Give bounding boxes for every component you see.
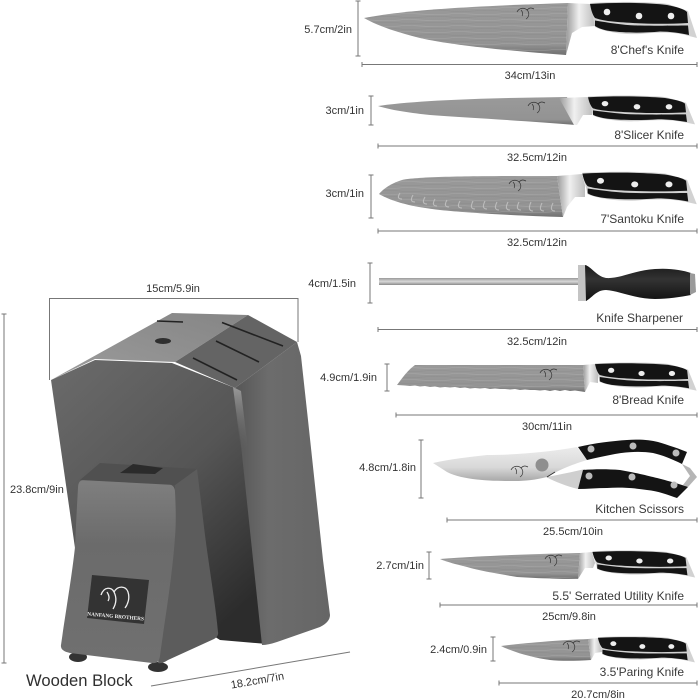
height dimension — [368, 96, 374, 125]
plate wordmark: NANFANG BROTHERS — [87, 612, 144, 622]
height dimension — [384, 364, 390, 391]
small block notch — [120, 464, 163, 474]
length dimension — [378, 327, 697, 332]
height label: 3cm/1in — [325, 105, 364, 117]
knife name: 7'Santoku Knife — [600, 212, 684, 226]
sharpener end cap — [690, 273, 696, 295]
height label: 23.8cm/9in — [10, 484, 64, 496]
santoku handle — [582, 172, 697, 204]
serrated blade — [440, 552, 595, 579]
panel: chef's knife — [304, 1, 697, 82]
length label: 34cm/13in — [505, 70, 555, 82]
length dimension — [362, 62, 697, 67]
length dimension — [378, 228, 697, 234]
panel: santoku knife — [325, 172, 697, 249]
height dimension — [368, 175, 374, 218]
panel: bread knife — [320, 362, 697, 433]
tool name: Kitchen Scissors — [595, 502, 684, 516]
santoku blade — [379, 174, 585, 217]
chef blade — [364, 3, 595, 55]
lower scissor handle — [578, 469, 688, 498]
lower scissor blade — [546, 469, 585, 489]
small block top face — [80, 463, 197, 485]
block name: Wooden Block — [26, 671, 133, 690]
height label: 4.8cm/1.8in — [359, 462, 416, 474]
length dimension — [447, 518, 697, 522]
knife name: 3.5'Paring Knife — [600, 665, 684, 679]
knife slots — [157, 321, 283, 380]
bread blade — [397, 364, 598, 392]
height label: 5.7cm/2in — [304, 24, 352, 36]
length label: 32.5cm/12in — [507, 152, 567, 164]
height label: 4cm/1.5in — [308, 278, 356, 290]
height label: 4.9cm/1.9in — [320, 372, 377, 384]
pivot screw — [536, 458, 548, 472]
height dimension — [426, 552, 432, 579]
slicer handle — [588, 96, 695, 124]
panel: knife sharpener — [308, 263, 697, 348]
panel: slicer knife — [325, 96, 697, 164]
height dimension — [356, 1, 360, 56]
knife name: 8'Slicer Knife — [614, 128, 684, 142]
block body: right face — [235, 342, 330, 645]
block top: slot face — [175, 315, 297, 388]
knife name: 8'Bread Knife — [612, 393, 684, 407]
height dimension — [418, 440, 424, 498]
length label: 30cm/11in — [522, 421, 572, 433]
length label: 25.5cm/10in — [543, 526, 603, 538]
round hole — [155, 338, 171, 344]
width label: 15cm/5.9in — [146, 283, 200, 295]
bread handle — [595, 362, 697, 391]
height dimension — [368, 263, 372, 303]
length label: 32.5cm/12in — [507, 336, 567, 348]
front corner highlight — [233, 387, 248, 450]
logo plate — [87, 575, 149, 624]
height label: 3cm/1in — [325, 188, 364, 200]
sharpening rod — [379, 278, 579, 285]
block body: front face — [51, 360, 267, 644]
scissor logo — [511, 466, 528, 477]
panel: wooden block with dimensions — [2, 283, 350, 692]
height label: 2.4cm/0.9in — [430, 644, 487, 656]
serrated handle — [592, 550, 695, 578]
height label: 2.7cm/1in — [376, 560, 424, 572]
santoku dimples — [398, 193, 555, 211]
small block feet — [69, 652, 87, 662]
plate emblem — [101, 587, 129, 609]
upper scissor handle — [578, 440, 687, 464]
tool name: Knife Sharpener — [596, 311, 683, 325]
depth label: 18.2cm/7in — [230, 670, 285, 692]
blade pivot line — [547, 472, 555, 477]
knife name: 5.5' Serrated Utility Knife — [552, 589, 684, 603]
length dimension — [440, 602, 697, 608]
height dimension line — [2, 314, 6, 663]
knife name: 8'Chef's Knife — [611, 43, 684, 57]
small block right face — [158, 469, 218, 663]
chef handle — [590, 2, 697, 38]
length dimension — [378, 144, 697, 148]
small block front face — [61, 480, 176, 663]
small front block — [61, 463, 218, 672]
upper scissor blade — [433, 447, 587, 481]
paring handle — [598, 636, 695, 662]
sharpener grip — [585, 265, 691, 301]
panel: kitchen scissors — [359, 440, 697, 538]
length dimension — [396, 412, 697, 418]
slicer blade — [378, 97, 593, 125]
height dimension — [490, 637, 496, 661]
block top: light face — [51, 313, 248, 380]
width dimension bracket — [50, 298, 298, 380]
panel: paring knife — [430, 636, 697, 700]
length dimension — [499, 680, 697, 686]
panel: serrated utility knife — [376, 550, 697, 623]
length label: 25cm/9.8in — [542, 611, 596, 623]
depth dimension line — [151, 652, 350, 686]
paring blade — [501, 638, 602, 661]
sharpener guard — [578, 265, 587, 301]
scissor spring — [682, 464, 697, 487]
length label: 32.5cm/12in — [507, 237, 567, 249]
